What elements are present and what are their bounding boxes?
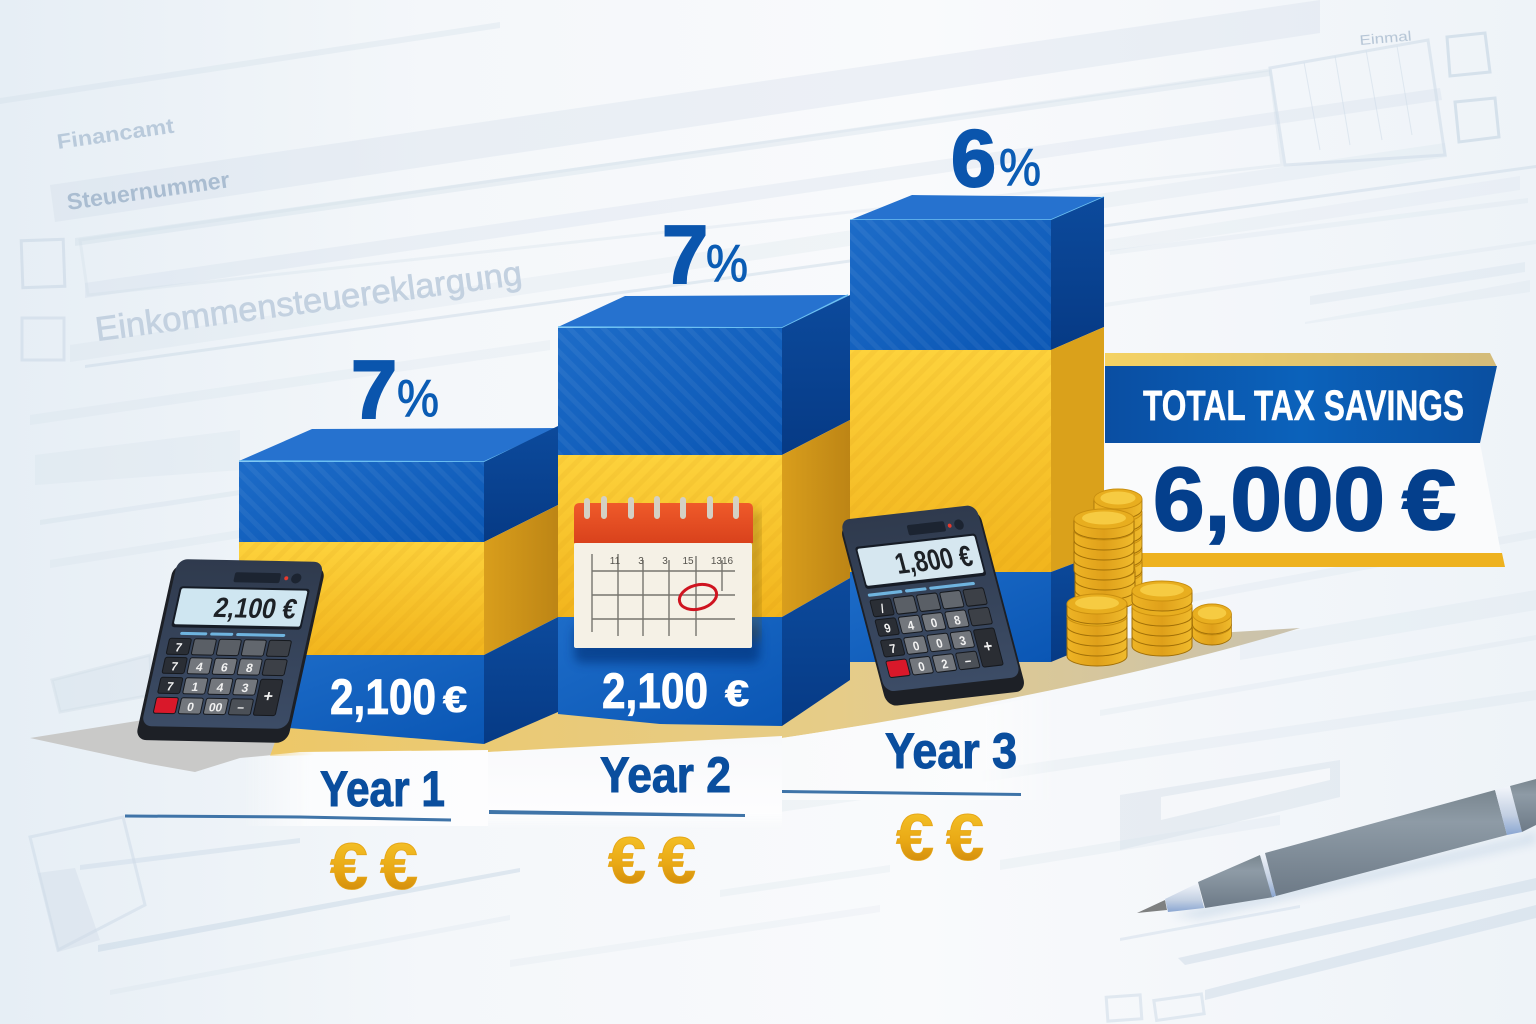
icon: calendar: 1316	[711, 556, 734, 567]
ground shadow	[30, 628, 1300, 772]
icon: calculator 1,800 €: 8	[952, 613, 963, 628]
percent label: 7% Year 2: 7	[662, 208, 708, 301]
euro coins: Year 3	[896, 800, 984, 874]
icon: calculator 1,800 €: 2	[940, 656, 950, 672]
icon: calculator 1,800 €: +	[981, 637, 995, 656]
euro coins: Year 2: €	[608, 823, 646, 897]
icon: calculator 2,100 €: 7	[174, 640, 184, 654]
percent label: 7% Year 1: 7	[351, 343, 397, 436]
icon: calculator 1,800 €: 0	[929, 615, 939, 630]
panel: Year 1 label: Year 1	[320, 761, 445, 817]
icon: calculator 1,800 €: 1,800 €	[891, 540, 976, 580]
form label: Steuernummer: Steuernummer	[65, 166, 231, 215]
form label: Financamt: Financamt	[55, 115, 176, 154]
percent label: 7% Year 2	[662, 208, 748, 301]
icon: calculator 2,100 €: 4	[215, 680, 225, 694]
euro coins: Year 2: €	[658, 823, 696, 897]
icon: calculator 1,800 €: 0	[911, 639, 921, 654]
icon: calculator 1,800 €: 9	[883, 621, 893, 636]
icon: calculator 1,800 €: /	[879, 601, 886, 616]
percent label: 7% Year 2: %	[706, 235, 748, 293]
icon: pen	[1137, 779, 1536, 918]
icon: coin stacks	[1067, 489, 1232, 666]
banner total: €	[1402, 453, 1456, 547]
icon: calculator 2,100 €: 00	[207, 700, 224, 715]
euro coins: Year 1: €	[330, 829, 368, 903]
panel: Year 3 label	[782, 692, 1060, 800]
panel: Year 3 label: Year 3	[885, 723, 1017, 779]
icon: calculator 2,100 €: 4	[195, 660, 205, 674]
percent label: 6% Year 3: %	[999, 139, 1041, 197]
banner total: 6,000	[1153, 450, 1385, 550]
panel: Year 2 label	[488, 736, 782, 830]
icon: calculator 1,800 €: 3	[958, 633, 968, 648]
icon: calendar: 15	[682, 556, 694, 567]
icon: calendar: 3	[638, 556, 644, 567]
icon: calculator 2,100 €: 6	[220, 660, 230, 674]
euro coins: Year 1: €	[380, 829, 418, 903]
amount: Year 1: 2,100	[330, 669, 436, 725]
euro coins: Year 3: €	[946, 800, 984, 874]
bar: Year 3	[850, 195, 1104, 662]
bar: Year 1	[239, 426, 558, 744]
euro coins: Year 3: €	[896, 800, 934, 874]
icon: calculator 2,100 €: 0	[186, 700, 196, 714]
euro coins: Year 1	[330, 829, 418, 903]
icon: calendar: 3	[662, 556, 668, 567]
percent label: 7% Year 1: %	[397, 370, 439, 428]
icon: calculator 2,100 €: +	[262, 687, 275, 705]
icon: calculator 2,100 €: 8	[245, 661, 255, 675]
icon: calculator 1,800 €: 7	[888, 641, 898, 656]
icon: calculator 1,800 €: −	[963, 654, 973, 669]
bar: Year 2	[558, 295, 850, 726]
euro coins: Year 2	[608, 823, 696, 897]
form label: Einkommensteuererklargung: Einkommensteuereklargung	[93, 254, 524, 349]
amount: Year 1: €	[443, 679, 467, 720]
icon: calculator 1,800 €: 0	[934, 636, 945, 651]
icon: calculator 2,100 €	[135, 559, 327, 743]
panel: Year 2 label: Year 2	[600, 747, 731, 803]
icon: calculator 2,100 €: 1	[190, 680, 200, 694]
icon: calendar	[574, 499, 760, 663]
icon: calculator 1,800 €: 0	[917, 659, 927, 674]
icon: calculator 2,100 €: 7	[165, 679, 175, 693]
icon: calculator 2,100 €: 7	[170, 659, 180, 673]
panel: total tax savings banner	[1105, 353, 1505, 567]
percent label: 6% Year 3: 6	[951, 114, 996, 204]
panel: Year 1 label	[125, 750, 488, 826]
icon: calendar: 11	[610, 556, 621, 567]
icon: calculator 2,100 €: 2,100 €	[211, 592, 300, 626]
amount: Year 2: €	[725, 673, 749, 714]
icon: calculator 2,100 €: −	[236, 701, 246, 715]
icon: calculator 1,800 €	[838, 504, 1027, 707]
amount: Year 2: 2,100	[602, 663, 708, 719]
icon: calculator 1,800 €: 4	[906, 618, 916, 633]
icon: calculator 2,100 €: 3	[240, 681, 250, 695]
form label: Einmal: Einmal	[1359, 28, 1412, 48]
percent label: 7% Year 1	[351, 343, 439, 436]
percent label: 6% Year 3	[951, 114, 1041, 204]
